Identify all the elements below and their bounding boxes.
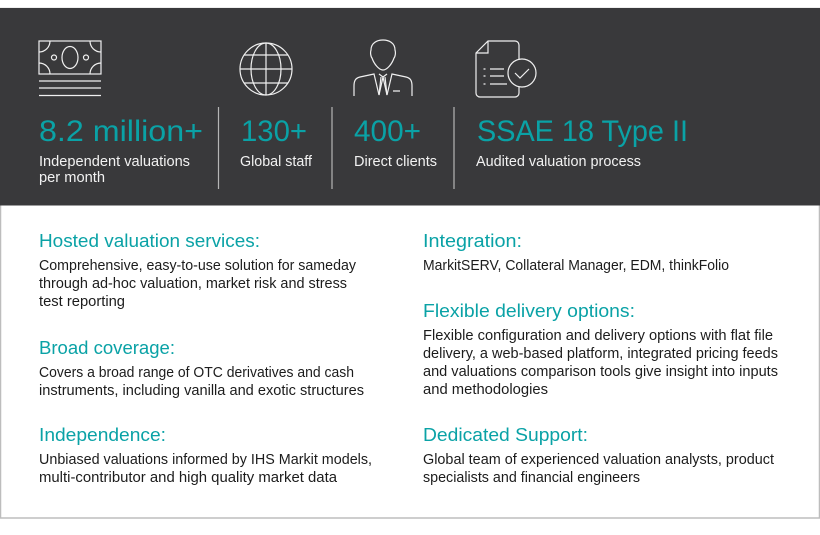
stat: independent valuations: Independent valuations	[39, 154, 190, 170]
stat: audit	[476, 115, 688, 170]
stat: global staff	[240, 115, 313, 170]
stat: direct clients	[354, 115, 437, 170]
icon: globe	[240, 43, 292, 95]
text block: flexible delivery options: and valuations comparison tools give insight into inputs	[423, 364, 778, 380]
text block: flexible delivery options: delivery, a web-based platform, integrated pricing feeds	[423, 346, 778, 362]
stat: independent valuations: 8.2 million+	[39, 115, 203, 148]
stat: independent valuations: per month	[39, 170, 105, 186]
icon: audited document	[476, 41, 536, 97]
text block: hosted valuation services: Hosted valuation services:	[39, 230, 260, 251]
text block: flexible delivery options: Flexible delivery options:	[423, 300, 635, 321]
icon: businessman	[354, 40, 412, 96]
text block: integration: Integration:	[423, 230, 522, 251]
text block: dedicated support: Dedicated Support:	[423, 424, 588, 445]
text block: flexible delivery options: and methodologies	[423, 382, 548, 398]
stat: global staff: 130+	[241, 115, 307, 148]
text block: independence: Unbiased valuations informed by IHS Markit models,	[39, 452, 372, 468]
text block: independence: Independence:	[39, 424, 166, 445]
text block: broad coverage: Broad coverage:	[39, 337, 175, 358]
text block: independence: multi-contributor and high quality market data	[39, 470, 338, 486]
stat: audit: Audited valuation process	[476, 154, 641, 170]
text block: broad coverage: Covers a broad range of OTC derivatives and cash	[39, 365, 354, 381]
text block: dedicated support: Global team of experienced valuation analysts, product	[423, 452, 774, 468]
text block: dedicated support	[423, 424, 774, 486]
stat: direct clients: 400+	[354, 115, 421, 148]
text block: hosted valuation services	[39, 230, 357, 310]
icon: banknote	[39, 41, 101, 96]
text block: hosted valuation services: Comprehensive, easy-to-use solution for sameday	[39, 258, 357, 274]
stat: global staff: Global staff	[240, 154, 313, 170]
stat: independent valuations	[39, 115, 203, 186]
panel: dark stats banner	[0, 8, 820, 206]
text block: flexible delivery options: Flexible configuration and delivery options with flat file	[423, 328, 773, 344]
text block: broad coverage: instruments, including vanilla and exotic structures	[39, 383, 364, 399]
text block: flexible delivery options	[423, 300, 778, 398]
text block: integration: MarkitSERV, Collateral Manager, EDM, thinkFolio	[423, 258, 729, 274]
text block: integration	[423, 230, 729, 274]
stat: direct clients: Direct clients	[354, 154, 437, 170]
text block: hosted valuation services: through ad-hoc valuation, market risk and stress	[39, 276, 347, 292]
text block: hosted valuation services: test reporting	[39, 294, 125, 310]
text block: broad coverage	[39, 337, 364, 399]
stat: audit: SSAE 18 Type II	[477, 115, 688, 148]
text block: dedicated support: specialists and financial engineers	[423, 470, 640, 486]
text block: independence	[39, 424, 372, 486]
